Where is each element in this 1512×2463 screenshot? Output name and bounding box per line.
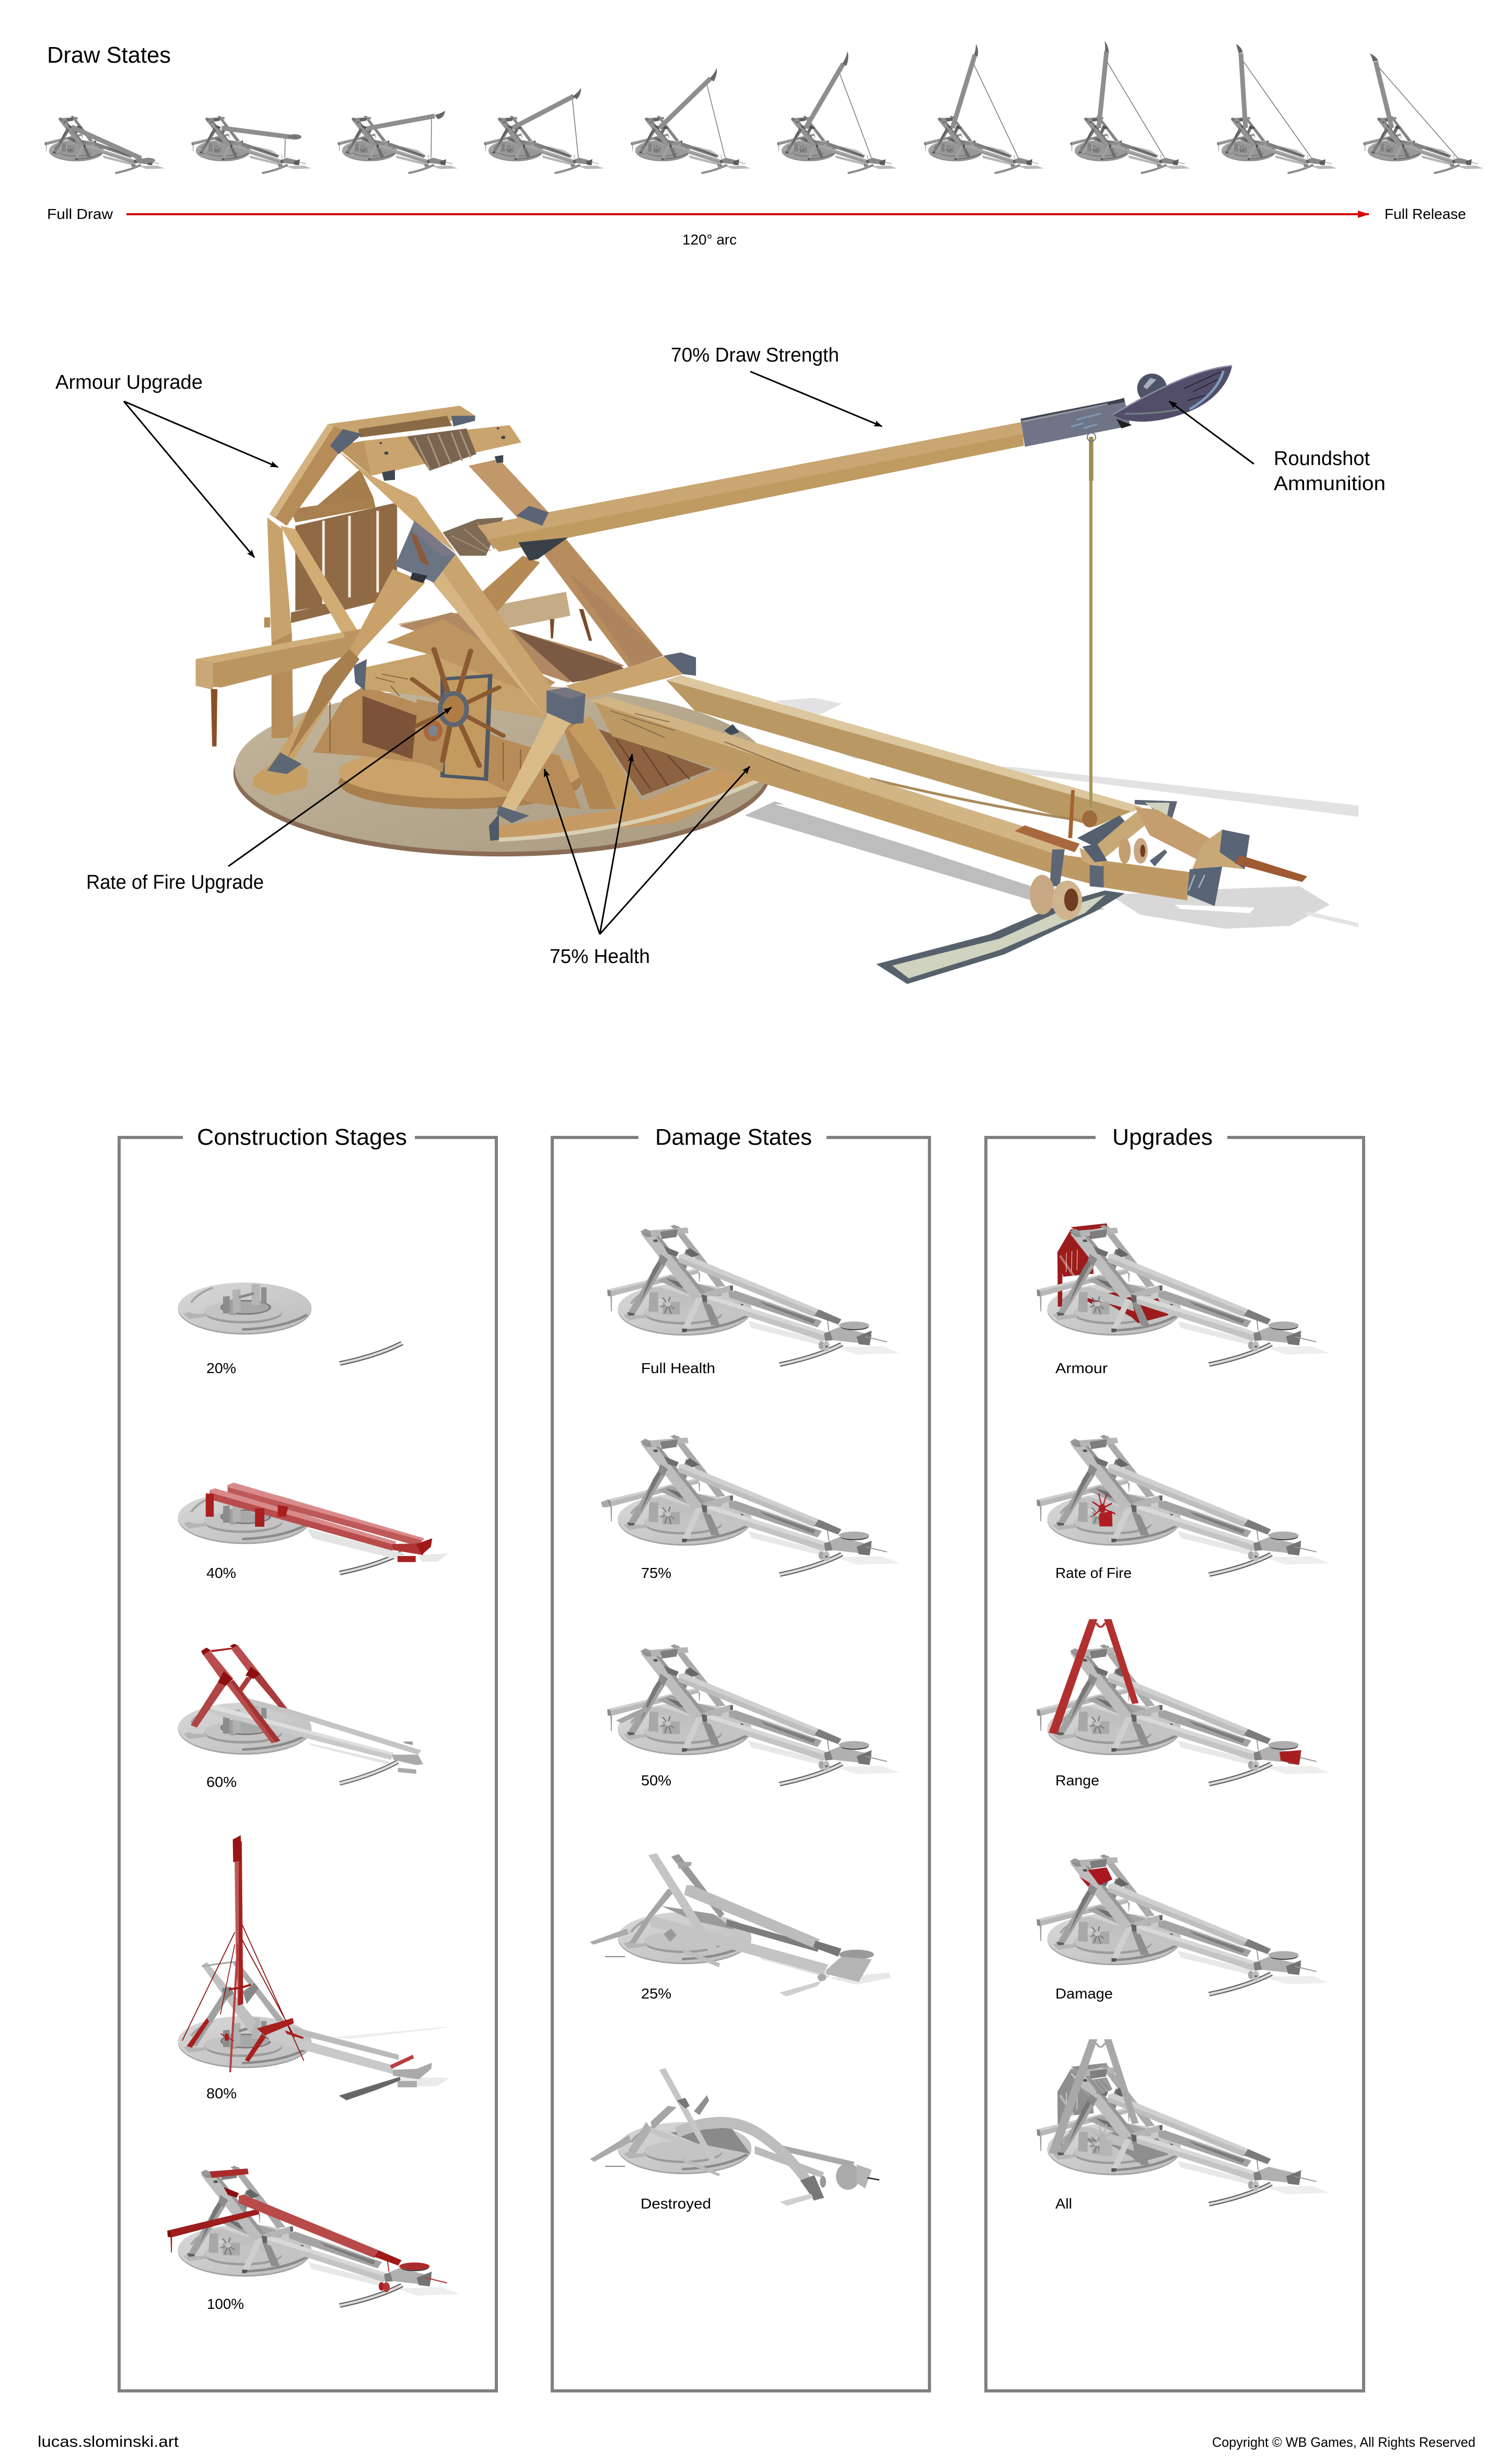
footer copyright: Copyright © WB Games, All Rights Reserved <box>1212 2434 1475 2450</box>
label: 120 degree arc: 120° arc <box>682 231 737 248</box>
panel: Upgrades <box>986 1124 1364 2391</box>
stage 80% <box>178 1835 449 2101</box>
rate of fire wheel upgrade <box>412 649 503 779</box>
stage 20%: 20% <box>206 1360 236 1376</box>
stage 80%: 80% <box>206 2085 237 2101</box>
footer credit: lucas.slominski.art <box>38 2433 179 2450</box>
stage 100%: 100% <box>207 2296 244 2312</box>
label: Full Draw: Full Draw <box>47 206 113 222</box>
50% health catapult: 50% <box>641 1772 671 1788</box>
draw states row of ten catapults <box>45 41 1483 173</box>
stage 40% <box>178 1483 448 1581</box>
callout: Rate of Fire Upgrade <box>86 707 451 893</box>
25% health catapult <box>590 1853 891 2002</box>
top crossbeam with rope <box>334 441 371 476</box>
destroyed catapult <box>590 2068 879 2212</box>
destroyed catapult: Destroyed <box>641 2195 711 2212</box>
callout: 70% Draw Strength <box>671 344 882 426</box>
50% health catapult <box>607 1644 900 1788</box>
Range upgrade catapult: Range <box>1055 1772 1099 1788</box>
front A-frame <box>267 569 425 769</box>
arrow: draw arc <box>126 213 1369 215</box>
iron joints rear <box>516 506 549 526</box>
callout: Roundshot Ammunition: Ammunition <box>1274 473 1386 495</box>
arm sleeve, bucket and roundshot <box>1020 366 1232 481</box>
callout: Roundshot Ammunition <box>1169 401 1386 495</box>
Range upgrade catapult <box>1037 1619 1329 1788</box>
ground shadows <box>745 698 1359 929</box>
callout: Roundshot Ammunition: Roundshot <box>1274 448 1370 470</box>
stage 60% <box>178 1644 423 1790</box>
75% health catapult <box>601 1435 900 1581</box>
throwing arm <box>477 422 1024 552</box>
stage 100% <box>167 2166 460 2312</box>
panel: Damage States <box>552 1124 929 2391</box>
Armour upgrade catapult: Armour <box>1055 1360 1108 1376</box>
frame beams and carriage <box>590 675 1307 920</box>
Full Health catapult: Full Health <box>641 1360 715 1376</box>
callout: 70% Draw Strength: 70% Draw Strength <box>671 344 839 366</box>
Armour upgrade catapult <box>1037 1223 1329 1376</box>
75% health catapult: 75% <box>641 1565 671 1581</box>
main painted catapult illustration <box>196 366 1359 984</box>
callout: 75% Health <box>544 754 750 968</box>
callout: 75% Health: 75% Health <box>550 946 650 968</box>
curved track <box>876 800 1177 984</box>
callout: Armour Upgrade: Armour Upgrade <box>55 371 203 393</box>
right wedge and planking <box>599 729 711 796</box>
Damage upgrade catapult <box>1037 1854 1329 2002</box>
panel: Construction Stages: Construction Stages <box>197 1124 407 1150</box>
Full Health catapult <box>607 1225 900 1376</box>
panel: Upgrades: Upgrades <box>1112 1124 1213 1150</box>
armour upgrade house <box>264 406 476 738</box>
stage 40%: 40% <box>206 1565 236 1581</box>
Rate of Fire upgrade catapult: Rate of Fire <box>1055 1565 1132 1581</box>
base disk and wooden structure <box>196 406 1024 856</box>
title: Draw States: Draw States <box>47 42 171 68</box>
front cross beam and iron caps <box>566 656 683 699</box>
rope from arm to carriage <box>1089 437 1092 808</box>
All upgrades catapult: All <box>1055 2195 1072 2212</box>
callout: Armour Upgrade <box>55 371 278 557</box>
panel: Damage States: Damage States <box>655 1124 812 1150</box>
stage 60%: 60% <box>206 1774 237 1790</box>
callout: Rate of Fire Upgrade: Rate of Fire Upgrade <box>86 872 264 893</box>
Damage upgrade catapult: Damage <box>1055 1985 1113 2002</box>
25% health catapult: 25% <box>641 1985 671 2002</box>
stage 20% <box>178 1283 402 1376</box>
label: Full Release: Full Release <box>1385 206 1466 222</box>
panel: Construction Stages <box>119 1124 496 2391</box>
Rate of Fire upgrade catapult <box>1037 1435 1329 1581</box>
All upgrades catapult <box>1037 2039 1329 2212</box>
